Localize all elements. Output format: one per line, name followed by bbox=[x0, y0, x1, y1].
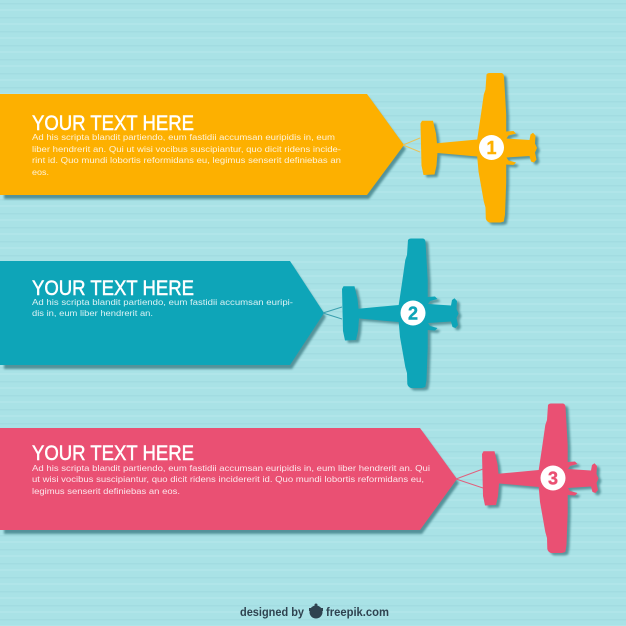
icon: plane 3 bbox=[482, 404, 602, 556]
heading 1: YOUR TEXT HERE bbox=[32, 112, 194, 135]
arrow: tow lines 1 bbox=[403, 138, 420, 152]
text block 2: dis in, eum liber hendrerit an. bbox=[32, 308, 153, 318]
arrow: tow lines 3 bbox=[456, 469, 483, 488]
text block 3: ut wisi vocibus suscipiantur, quo dicit ridens incidererit id. Quo mundi lobortis reformidans eu, bbox=[32, 474, 424, 484]
text block 1: Ad his scripta blandit partiendo, eum fastidii accumsan euripidis in, eum bbox=[32, 132, 335, 142]
text block 2: Ad his scripta blandit partiendo, eum fastidii accumsan euripi- bbox=[32, 297, 293, 307]
heading 2: YOUR TEXT HERE bbox=[32, 277, 194, 300]
number 3: 3 bbox=[548, 468, 558, 488]
footer: freepik credit: designed by bbox=[240, 607, 305, 619]
arrow: tow lines 2 bbox=[323, 307, 342, 319]
footer: freepik credit bbox=[240, 604, 389, 619]
text block 1 bbox=[32, 132, 341, 177]
text block 3: Ad his scripta blandit partiendo, eum fastidii accumsan euripidis in, eum liber hendrerit an. Qui bbox=[32, 463, 430, 473]
icon: plane 1 bbox=[420, 73, 540, 225]
text block 2 bbox=[32, 297, 293, 318]
text block 3: legimus senserit definiebas an eos. bbox=[32, 486, 180, 496]
heading 3: YOUR TEXT HERE bbox=[32, 442, 194, 465]
text block 1: liber hendrerit an. Qui ut wisi vocibus suscipiantur, quo dicit ridens incide- bbox=[32, 144, 341, 154]
text block 1: rint id. Quo mundi lobortis reformidans eu, legimus senserit definiebas an bbox=[32, 155, 341, 165]
number 2: 2 bbox=[408, 304, 418, 324]
panel: banner 3 bbox=[0, 428, 459, 534]
footer: freepik credit: freepik.com bbox=[326, 607, 389, 619]
icon: freepik logo bbox=[309, 604, 323, 618]
icon: plane 2 bbox=[342, 238, 462, 390]
number 1: 1 bbox=[486, 138, 497, 158]
text block 1: eos. bbox=[32, 167, 49, 177]
text block 3 bbox=[32, 463, 430, 496]
panel: banner 1 bbox=[0, 94, 406, 199]
panel: banner 2 bbox=[0, 261, 326, 369]
